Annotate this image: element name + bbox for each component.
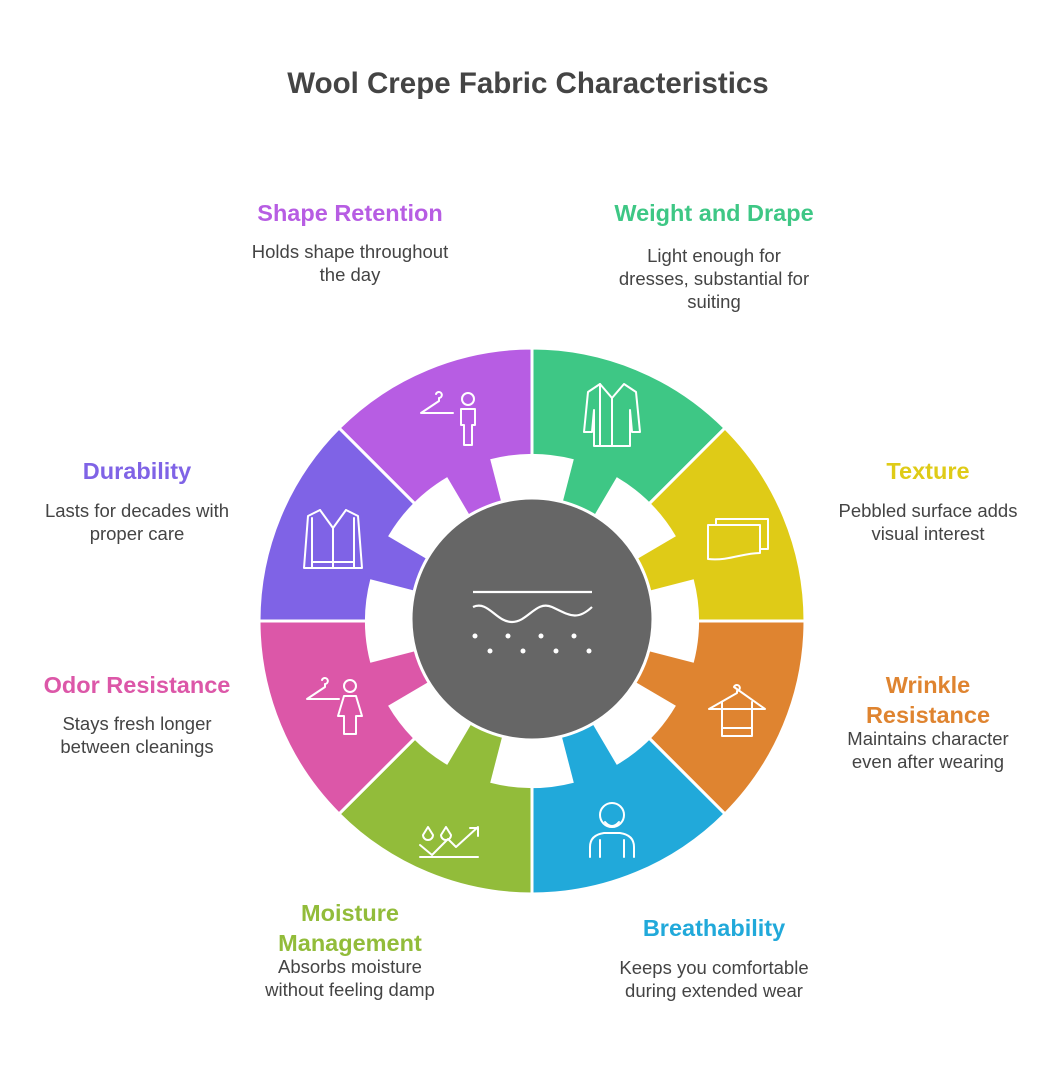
label: weight and drape: suiting [687, 291, 741, 312]
label: breathability: Breathability [643, 915, 785, 941]
label: texture: visual interest [871, 523, 985, 544]
icon: person (breathability) [590, 803, 634, 857]
label: odor resistance: Stays fresh longer [62, 713, 212, 734]
label: wrinkle resistance [847, 672, 1009, 772]
segment: durability [259, 428, 532, 621]
label: weight and drape: Weight and Drape [614, 200, 814, 226]
icon: drops and arrows (moisture) [420, 827, 478, 857]
label: weight and drape [614, 200, 814, 312]
title: Wool Crepe Fabric Characteristics [287, 67, 769, 100]
segment: texture [532, 428, 805, 621]
segment: weight and drape [532, 348, 725, 621]
segment: moisture management [339, 621, 532, 894]
label: odor resistance [44, 672, 230, 757]
label: durability: proper care [90, 523, 184, 544]
label: texture: Pebbled surface adds [839, 500, 1017, 521]
label: odor resistance: Odor Resistance [44, 672, 230, 698]
label: odor resistance: between cleanings [60, 736, 214, 757]
icon: fabric layers [472, 592, 592, 654]
label: shape retention: the day [320, 264, 380, 285]
label: wrinkle resistance: Resistance [866, 702, 990, 728]
label: texture [839, 458, 1017, 544]
label: wrinkle resistance: Wrinkle [886, 672, 970, 698]
icon: robe (weight and drape) [584, 384, 640, 446]
label: breathability: during extended wear [625, 980, 803, 1001]
label: moisture management: Moisture [301, 900, 399, 926]
center circle [411, 498, 653, 740]
segment: odor resistance [259, 621, 532, 814]
label: moisture management: without feeling damp [265, 979, 435, 1000]
segment: breathability [532, 621, 725, 894]
label: breathability: Keeps you comfortable [619, 957, 809, 978]
icon: hanger and person (odor resistance) [307, 678, 362, 734]
label: shape retention: Holds shape throughout [252, 241, 448, 262]
icon: fabric sheets (texture) [708, 519, 768, 559]
label: texture: Texture [886, 458, 970, 484]
label: moisture management [265, 900, 435, 1000]
icon: hanger and person (shape retention) [421, 392, 475, 445]
label: durability [45, 458, 229, 544]
icon: cardigan (durability) [304, 510, 362, 568]
segment: shape retention [339, 348, 532, 621]
label: shape retention: Shape Retention [257, 200, 443, 226]
label: breathability [619, 915, 809, 1001]
label: durability: Lasts for decades with [45, 500, 229, 521]
label: moisture management: Management [278, 930, 422, 956]
label: weight and drape: dresses, substantial for [619, 268, 809, 289]
label: durability: Durability [83, 458, 191, 484]
label: weight and drape: Light enough for [647, 245, 781, 266]
label: moisture management: Absorbs moisture [278, 956, 422, 977]
label: wrinkle resistance: Maintains character [847, 728, 1009, 749]
label: wrinkle resistance: even after wearing [852, 751, 1004, 772]
label: shape retention [252, 200, 448, 285]
segment: wrinkle resistance [532, 621, 805, 814]
icon: towel on hanger (wrinkle resistance) [709, 685, 765, 736]
